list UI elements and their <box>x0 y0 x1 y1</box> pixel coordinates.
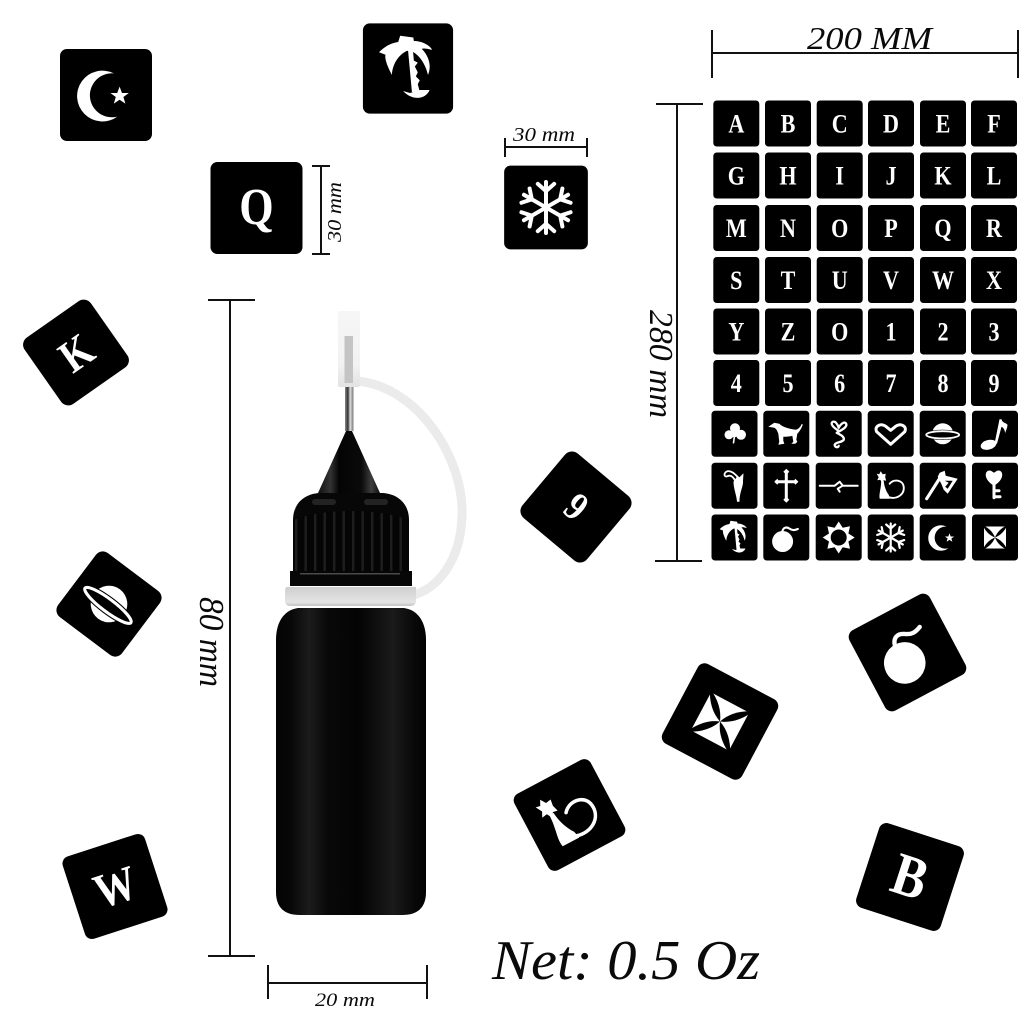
stencil Y <box>713 308 759 354</box>
stencil 4: 4 <box>731 370 742 398</box>
stencil A: A <box>728 111 745 139</box>
stencil O: O <box>831 215 848 243</box>
stencil 8: 8 <box>937 370 949 398</box>
stencil U <box>817 257 863 303</box>
stencil X: X <box>986 267 1003 295</box>
dimension: 20 mm bottle width: 20 mm <box>315 990 375 1011</box>
tile: letter K rotated <box>20 296 132 409</box>
stencil Q <box>920 205 966 251</box>
net weight label: Net: 0.5 Oz <box>491 930 760 992</box>
dimension: 30 mm tile height <box>312 166 346 254</box>
stencil sun <box>816 514 862 560</box>
stencil S: S <box>730 267 742 295</box>
stencil 2: 2 <box>937 319 949 347</box>
stencil D <box>868 100 914 146</box>
bottle body <box>276 608 426 915</box>
stencil heart <box>868 411 914 457</box>
stencil M <box>713 205 759 251</box>
stencil S <box>713 257 759 303</box>
tile: bomb rotated <box>846 591 969 714</box>
stencil 7: 7 <box>885 370 897 398</box>
tile: letter Q: Q <box>239 179 274 236</box>
tile: letter B rotated <box>854 821 966 933</box>
stencil 5: 5 <box>782 370 794 398</box>
dimension: 80 mm bottle height: 80 mm <box>192 597 231 687</box>
stencil 7 <box>868 360 914 406</box>
stencil 6: 6 <box>834 370 845 398</box>
stencil clover <box>712 411 758 457</box>
stencil squiggle heart <box>816 411 862 457</box>
dimension: 200 MM sheet width <box>712 20 1018 78</box>
dimension: 30 mm tile height: 30 mm <box>324 182 346 243</box>
stencil F <box>971 100 1017 146</box>
stencil 3: 3 <box>988 319 1000 347</box>
stencil V <box>868 257 914 303</box>
stencil U: U <box>832 267 848 295</box>
dimension: 280 mm sheet height: 280 mm <box>642 310 679 418</box>
stencil B <box>765 100 811 146</box>
stencil 0 <box>817 308 863 354</box>
stencil bomb <box>763 514 809 560</box>
stencil H <box>765 152 811 198</box>
stencil F: F <box>987 111 1001 139</box>
tile: cross rotated <box>659 661 781 782</box>
stencil A <box>713 100 759 146</box>
stencil O <box>817 205 863 251</box>
flexible tether tube <box>358 381 462 596</box>
dimension: 30 mm tile width: 30 mm <box>512 124 575 146</box>
tile: letter B rotated: B <box>884 841 936 914</box>
sheet row: Y, Z, 0 to 3 <box>713 308 1017 354</box>
stencil R <box>971 205 1017 251</box>
tile: crescent moon and star <box>60 49 152 141</box>
stencil Y: Y <box>728 319 744 347</box>
stencil moon and star <box>920 514 966 560</box>
black cone nozzle <box>318 431 380 493</box>
stencil 9 <box>971 360 1017 406</box>
stencil E: E <box>936 111 950 139</box>
sheet row: clover to music note <box>712 411 1018 457</box>
bottle with needle cap <box>276 311 462 915</box>
stencil Q: Q <box>934 215 952 243</box>
stencil 9: 9 <box>988 370 1000 398</box>
stencil L <box>971 152 1017 198</box>
tile: numeral 9 rotated: 9 <box>555 485 596 530</box>
stencil G: G <box>728 163 745 191</box>
stencil C <box>817 100 863 146</box>
stencil 5 <box>765 360 811 406</box>
dimension: 280 mm sheet height <box>642 104 703 561</box>
stencil Z: Z <box>781 319 795 347</box>
stencil D: D <box>883 111 899 139</box>
stencil 6 <box>817 360 863 406</box>
dimension: 200 MM sheet width: 200 MM <box>807 20 935 56</box>
sheet row: G to L <box>713 152 1017 198</box>
stencil Z <box>765 308 811 354</box>
tile: letter W rotated <box>61 832 169 941</box>
stencil P <box>868 205 914 251</box>
stencil 2 <box>920 308 966 354</box>
stencil hooked figure <box>712 463 758 509</box>
stencil T: T <box>781 267 795 295</box>
metal needle <box>345 387 354 431</box>
stencil music note <box>972 411 1018 457</box>
stencil L: L <box>987 163 1001 191</box>
stencil W <box>920 257 966 303</box>
sheet row: M to R <box>713 205 1017 251</box>
tile: palm tree <box>363 23 453 114</box>
ribbed cap <box>293 493 409 571</box>
stencil I: I <box>835 163 844 191</box>
stencil sheet grid <box>712 100 1018 560</box>
stencil 8 <box>920 360 966 406</box>
stencil 3 <box>971 308 1017 354</box>
dimension: 20 mm bottle width <box>268 965 427 1011</box>
tile: numeral 9 rotated <box>517 448 635 566</box>
stencil cat <box>868 463 914 509</box>
tile: snowflake <box>504 166 588 249</box>
stencil line knot <box>816 463 862 509</box>
tile: ringed planet rotated <box>53 548 165 660</box>
stencil ringed planet <box>920 411 966 457</box>
stencil snowflake <box>868 514 914 560</box>
stencil dog <box>763 411 809 457</box>
stencil C: C <box>832 111 848 139</box>
stencil I <box>817 152 863 198</box>
cap collar <box>290 571 412 586</box>
needle sleeve <box>338 311 360 387</box>
stencil J <box>868 152 914 198</box>
stencil R: R <box>986 215 1003 243</box>
stencil E <box>920 100 966 146</box>
stencil axe <box>920 463 966 509</box>
stencil palm <box>712 514 758 560</box>
sheet row: hooked figure to key <box>712 463 1018 509</box>
stencil V: V <box>883 267 900 295</box>
dimension: 30 mm tile width <box>505 124 587 157</box>
stencil 1 <box>868 308 914 354</box>
tile: letter Q <box>210 162 302 254</box>
tile: cat rotated <box>511 757 628 873</box>
translucent neck ring <box>285 587 416 606</box>
stencil heart key <box>972 463 1018 509</box>
stencil P: P <box>884 215 898 243</box>
stencil K <box>920 152 966 198</box>
stencil W: W <box>932 267 954 295</box>
stencil 4 <box>713 360 759 406</box>
sheet row: S to X <box>713 257 1017 303</box>
sheet row: A to F <box>713 100 1017 146</box>
stencil B: B <box>781 111 795 139</box>
stencil M: M <box>726 215 747 243</box>
sheet row: 4 to 9 <box>713 360 1017 406</box>
stencil N <box>765 205 811 251</box>
tile: letter W rotated: W <box>87 855 143 919</box>
stencil 1: 1 <box>885 319 897 347</box>
stencil T <box>765 257 811 303</box>
stencil J: J <box>885 163 897 191</box>
stencil 0: O <box>831 319 848 347</box>
stencil cross <box>763 463 809 509</box>
stencil N: N <box>780 215 797 243</box>
stencil G <box>713 152 759 198</box>
tile: letter K rotated: K <box>50 324 104 383</box>
stencil X <box>971 257 1017 303</box>
stencil iron cross <box>972 514 1018 560</box>
stencil K: K <box>934 163 952 191</box>
dimension: 80 mm bottle height <box>192 300 255 956</box>
stencil H: H <box>779 163 797 191</box>
sheet row: palm to iron cross <box>712 514 1018 560</box>
